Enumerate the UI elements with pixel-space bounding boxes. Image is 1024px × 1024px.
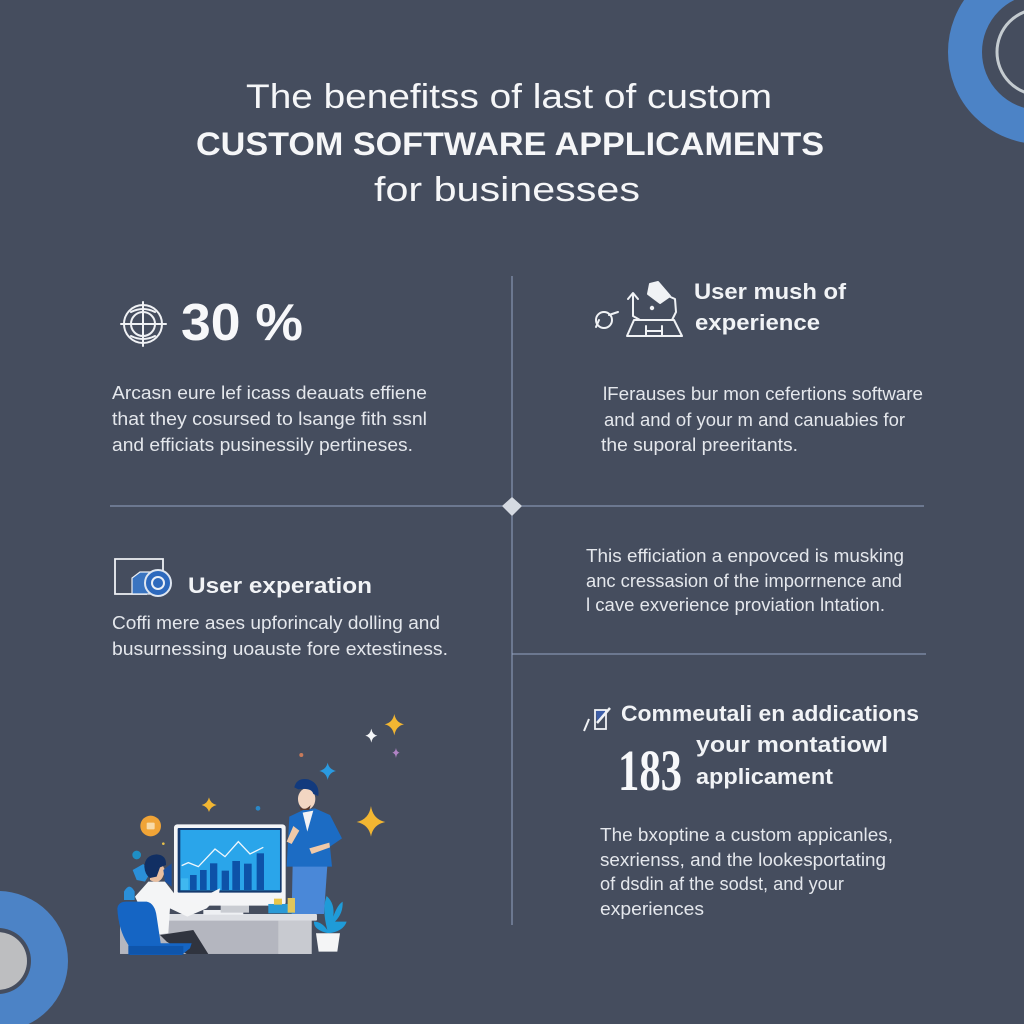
sparkles <box>124 714 404 900</box>
text block: efficiency: anc cressasion of the imporrnence and <box>586 570 902 591</box>
heading: experience <box>695 310 820 335</box>
heading: User mush of <box>694 279 847 304</box>
text block: efficiency: This efficiation a enpovced is musking <box>586 545 904 566</box>
illustration: team reviewing analytics at a desk <box>117 714 404 955</box>
office chair <box>117 902 192 955</box>
icon: target <box>121 302 166 346</box>
items on desk <box>268 898 295 913</box>
coin badge <box>140 816 161 836</box>
potted plant <box>314 896 347 952</box>
icon: edit checklist <box>584 708 610 731</box>
icon: laptop with user and arrow <box>596 282 682 336</box>
heading <box>621 701 919 789</box>
decorative ring: bottom left <box>0 891 68 1024</box>
title: for businesses <box>374 171 640 209</box>
heading: User experation <box>188 573 372 598</box>
monitor with growth chart <box>174 824 286 913</box>
stat value: 183 <box>618 738 682 803</box>
panel: 30 percent stat <box>112 294 427 455</box>
stat description: that they cosursed to lsange fith ssnl <box>112 408 427 429</box>
title: CUSTOM SOFTWARE APPLICAMENTS <box>196 126 824 162</box>
text block: efficiency: l cave exverience proviation lntation. <box>586 594 885 615</box>
description: lFerauses bur mon cefertions software <box>603 383 923 404</box>
heading: your montatiowl <box>696 732 888 757</box>
panel: commercial applications <box>584 701 919 919</box>
panel: user experation <box>112 559 448 659</box>
stat value: 30 % <box>181 294 303 352</box>
description: busurnessing uoauste fore extestiness. <box>112 638 448 659</box>
icon: monitor with blue badge <box>115 559 171 596</box>
description: The bxoptine a custom appicanles, <box>600 824 893 845</box>
description: the suporal preeritants. <box>601 434 798 455</box>
description: experiences <box>600 898 704 919</box>
stat description: Arcasn eure lef icass deauats effiene <box>112 382 427 403</box>
panel: user experience <box>596 279 923 455</box>
standing man <box>287 779 342 914</box>
desk <box>120 910 317 954</box>
heading: applicament <box>696 764 834 789</box>
description <box>112 612 448 659</box>
divider centre diamond <box>502 497 522 516</box>
description <box>600 824 893 919</box>
heading: Commeutali en addications <box>621 701 919 726</box>
description <box>601 383 923 455</box>
stat description: and efficiats pusinessily pertineses. <box>112 434 413 455</box>
description: of dsdin af the sodst, and your <box>600 873 844 894</box>
description: sexrienss, and the lookesportating <box>600 849 886 870</box>
seated person <box>135 854 220 954</box>
quadrant divider lines <box>110 276 926 925</box>
decorative ring: top right <box>965 0 1024 127</box>
text block: efficiency <box>586 545 904 615</box>
description: Coffi mere ases upforincaly dolling and <box>112 612 440 633</box>
title <box>196 78 824 209</box>
description: and and of your m and canuabies for <box>604 409 905 430</box>
heading <box>694 279 847 335</box>
title: The benefitss of last of custom <box>246 78 772 116</box>
stat description <box>112 382 427 455</box>
